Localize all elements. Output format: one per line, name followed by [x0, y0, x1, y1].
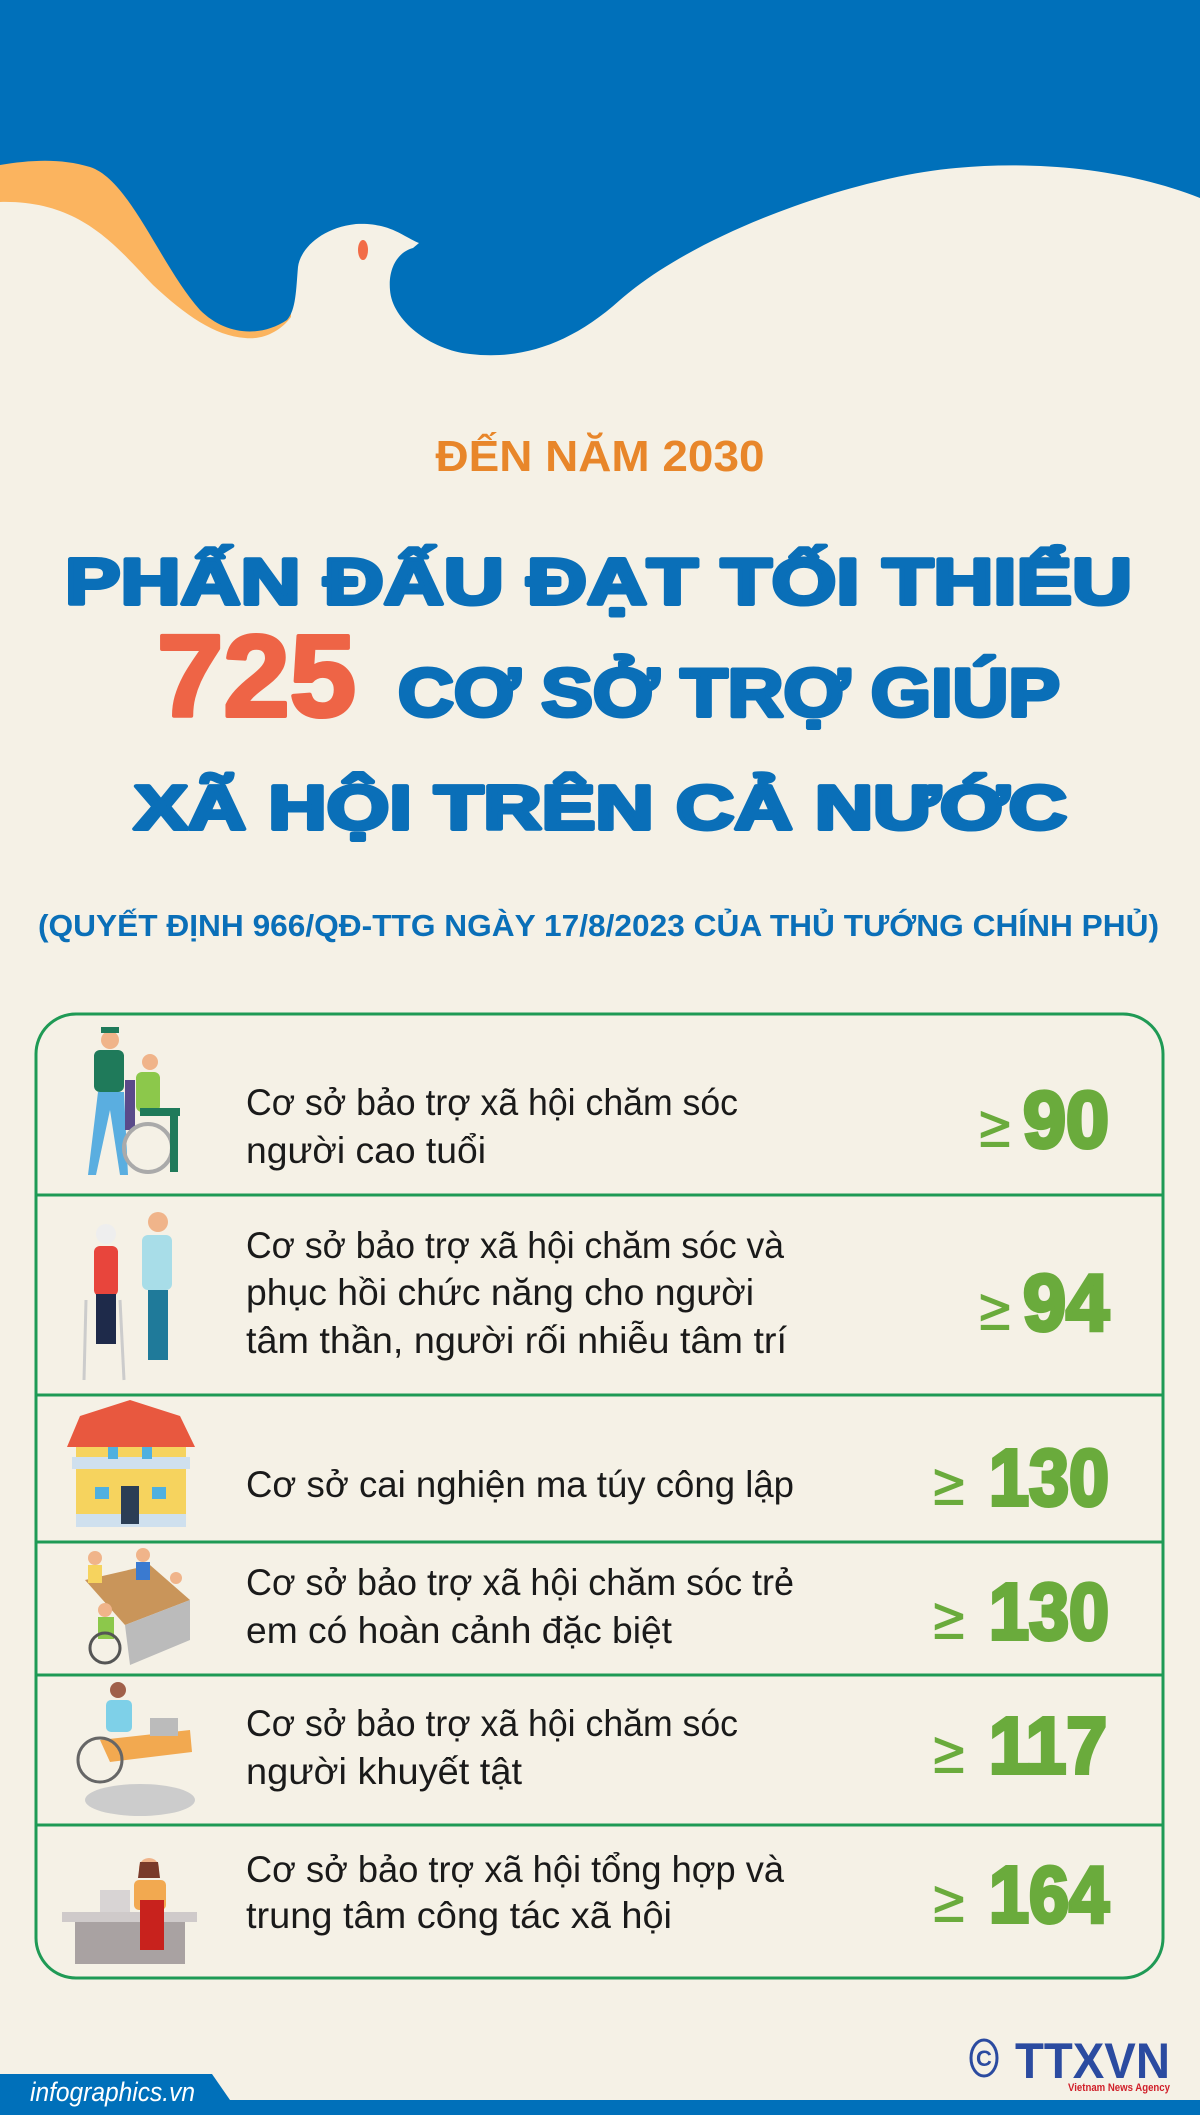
value — [930, 1701, 1107, 1790]
value: ≥ — [976, 1089, 1014, 1162]
value: 94 — [1023, 1258, 1109, 1347]
row 4: children: Cơ sở bảo trợ xã hội chăm sóc trẻ — [246, 1562, 794, 1603]
footer bar — [0, 2074, 1200, 2115]
logo: TTXVN: TTXVN — [1015, 2033, 1170, 2089]
row 2: mental health: phục hồi chức năng cho người — [246, 1272, 754, 1313]
header: blue sky with dove — [0, 0, 1200, 355]
icon: caregiver and wheelchair — [88, 1027, 180, 1175]
logo: TTXVN: Vietnam News Agency — [1068, 2082, 1171, 2094]
icon: walker and helper — [84, 1212, 172, 1380]
header: orange wave — [0, 150, 291, 338]
row 1: elderly: người cao tuổi — [246, 1130, 486, 1171]
row 6: general centres: trung tâm công tác xã hội — [246, 1895, 672, 1936]
row 5: disabilities: người khuyết tật — [246, 1751, 523, 1792]
subtitle year: ĐẾN NĂM 2030 — [436, 431, 764, 481]
value — [930, 1567, 1109, 1656]
icon: dove eye — [358, 240, 368, 260]
icon: woman at sewing table — [62, 1858, 197, 1964]
value — [930, 1850, 1109, 1939]
icon: children at table — [85, 1548, 190, 1665]
panel: facility table — [36, 1014, 1163, 1978]
value — [976, 1258, 1109, 1347]
row 2: mental health: tâm thần, người rối nhiễu tâm trí — [246, 1320, 788, 1361]
value: 164 — [989, 1850, 1109, 1939]
row 1: elderly — [88, 1027, 1109, 1175]
title: 725 — [157, 611, 356, 741]
value: ≥ — [976, 1272, 1014, 1345]
logo: TTXVN — [971, 2033, 1171, 2094]
row 3: rehab centre: Cơ sở cai nghiện ma túy công lập — [246, 1464, 794, 1505]
row 6: general centres — [62, 1849, 1109, 1964]
value: ≥ — [930, 1864, 968, 1937]
icon: wheelchair user at desk — [78, 1682, 195, 1816]
value: 130 — [989, 1433, 1109, 1522]
value: 117 — [989, 1701, 1107, 1790]
row 5: disabilities: Cơ sở bảo trợ xã hội chăm sóc — [246, 1703, 738, 1744]
title: XÃ HỘI TRÊN CẢ NƯỚC — [134, 774, 1067, 843]
icon: house — [67, 1400, 195, 1527]
row 6: general centres: Cơ sở bảo trợ xã hội tổng hợp và — [246, 1849, 784, 1890]
logo: TTXVN: C — [976, 2046, 992, 2071]
row 3: rehab centre — [67, 1400, 1109, 1527]
row 1: elderly: Cơ sở bảo trợ xã hội chăm sóc — [246, 1082, 738, 1123]
row 2: mental health: Cơ sở bảo trợ xã hội chăm sóc và — [246, 1225, 784, 1266]
value: 130 — [989, 1567, 1109, 1656]
value: ≥ — [930, 1447, 968, 1520]
title — [65, 545, 1132, 843]
footer bar: infographics.vn — [30, 2077, 195, 2107]
value: 90 — [1023, 1075, 1109, 1164]
row 5: disabilities — [78, 1682, 1107, 1816]
title: CƠ SỞ TRỢ GIÚP — [398, 654, 1060, 731]
value: ≥ — [930, 1581, 968, 1654]
row 4: children — [85, 1548, 1109, 1665]
row 2: mental health — [84, 1212, 1109, 1380]
title: PHẤN ĐẤU ĐẠT TỐI THIỂU — [65, 545, 1132, 618]
decision reference: (QUYẾT ĐỊNH 966/QĐ-TTG NGÀY 17/8/2023 CỦA THỦ TƯỚNG CHÍNH PHỦ) — [38, 907, 1159, 943]
row 4: children: em có hoàn cảnh đặc biệt — [246, 1610, 673, 1651]
value: ≥ — [930, 1715, 968, 1788]
value — [930, 1433, 1109, 1522]
value — [976, 1075, 1109, 1164]
